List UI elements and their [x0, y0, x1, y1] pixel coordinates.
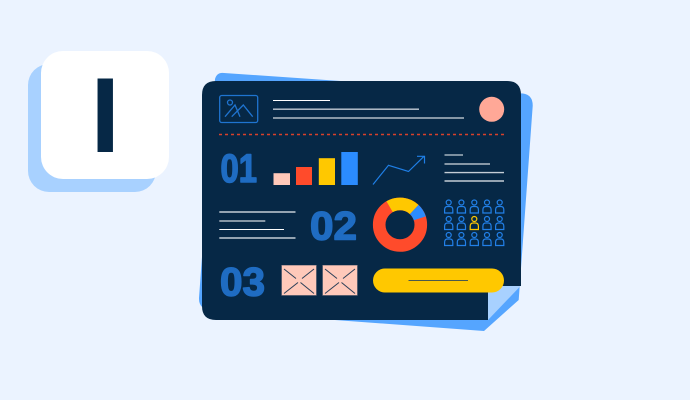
bar chart: [274, 152, 358, 185]
trend arrow: [373, 156, 424, 184]
yellow button: [373, 268, 504, 292]
number 03: 03: [220, 260, 265, 304]
number 01: 01: [220, 147, 257, 191]
text lines upper right: [444, 155, 504, 181]
header text lines: [273, 100, 464, 118]
letter I: I: [90, 55, 120, 175]
people grid: [445, 200, 504, 246]
back sheet: [199, 73, 533, 331]
dark card: [202, 81, 521, 320]
letter tile: [28, 51, 169, 192]
envelope right: [323, 265, 357, 295]
envelope left: [282, 265, 316, 295]
dashboard illustration: [199, 73, 533, 331]
image placeholder icon: [220, 96, 258, 122]
donut chart: [379, 204, 421, 246]
page curl: [488, 286, 520, 320]
dashed divider: [219, 134, 504, 136]
number 02: 02: [310, 204, 357, 248]
tile shadow: [28, 64, 156, 192]
text lines middle left: [219, 212, 296, 238]
tile face: [41, 51, 169, 179]
avatar circle: [479, 97, 504, 122]
